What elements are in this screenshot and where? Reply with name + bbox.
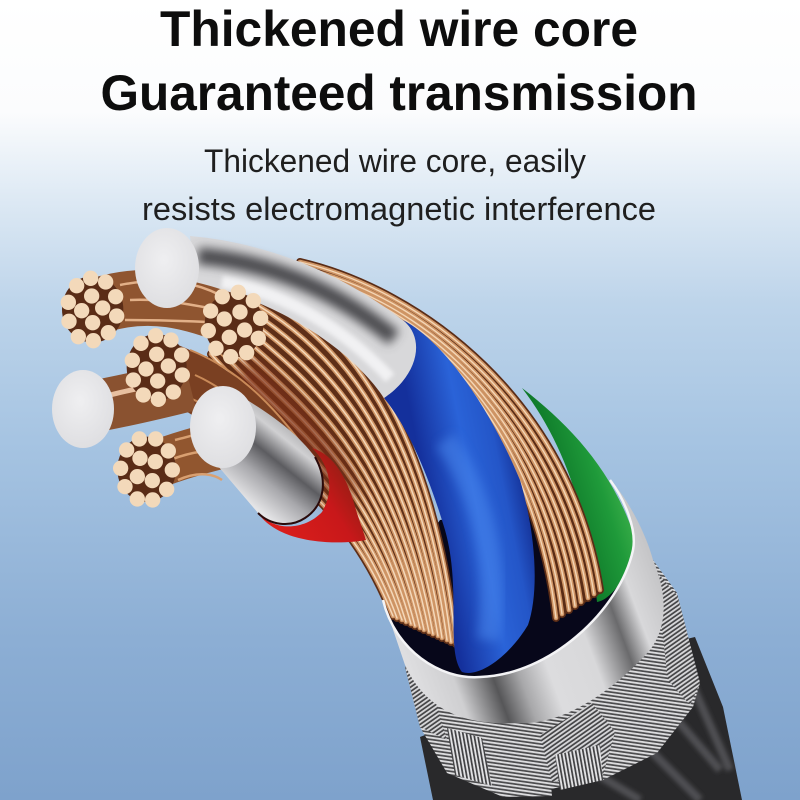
white conductor end: top (135, 228, 199, 308)
copper cluster end: center (125, 328, 190, 407)
title: Thickened wire core (160, 1, 638, 57)
white conductor end: lower (190, 386, 256, 468)
main copper strand bundle (193, 288, 460, 646)
title (100, 1, 698, 121)
blue wire (384, 320, 535, 673)
copper cluster end: lower (113, 431, 180, 508)
subtitle text (142, 143, 656, 227)
white conductor end: left (52, 370, 114, 448)
lower silver conductor (218, 390, 323, 524)
dark cable interior (385, 500, 633, 677)
left copper wires behind strand ends (85, 281, 320, 490)
copper cluster end: upper right (201, 285, 268, 364)
red wire (258, 448, 366, 542)
title: Guaranteed transmission (100, 65, 698, 121)
subtitle text: resists electromagnetic interference (142, 191, 656, 227)
front metal collar (383, 480, 664, 723)
black braided sleeve (420, 637, 742, 800)
rear copper strands (300, 262, 603, 620)
upper silver conductor (190, 236, 416, 398)
green wire (522, 388, 634, 602)
cable illustration (52, 228, 742, 800)
copper cluster end: upper left (61, 271, 124, 348)
knurled metal band (405, 560, 700, 797)
subtitle text: Thickened wire core, easily (204, 143, 586, 179)
